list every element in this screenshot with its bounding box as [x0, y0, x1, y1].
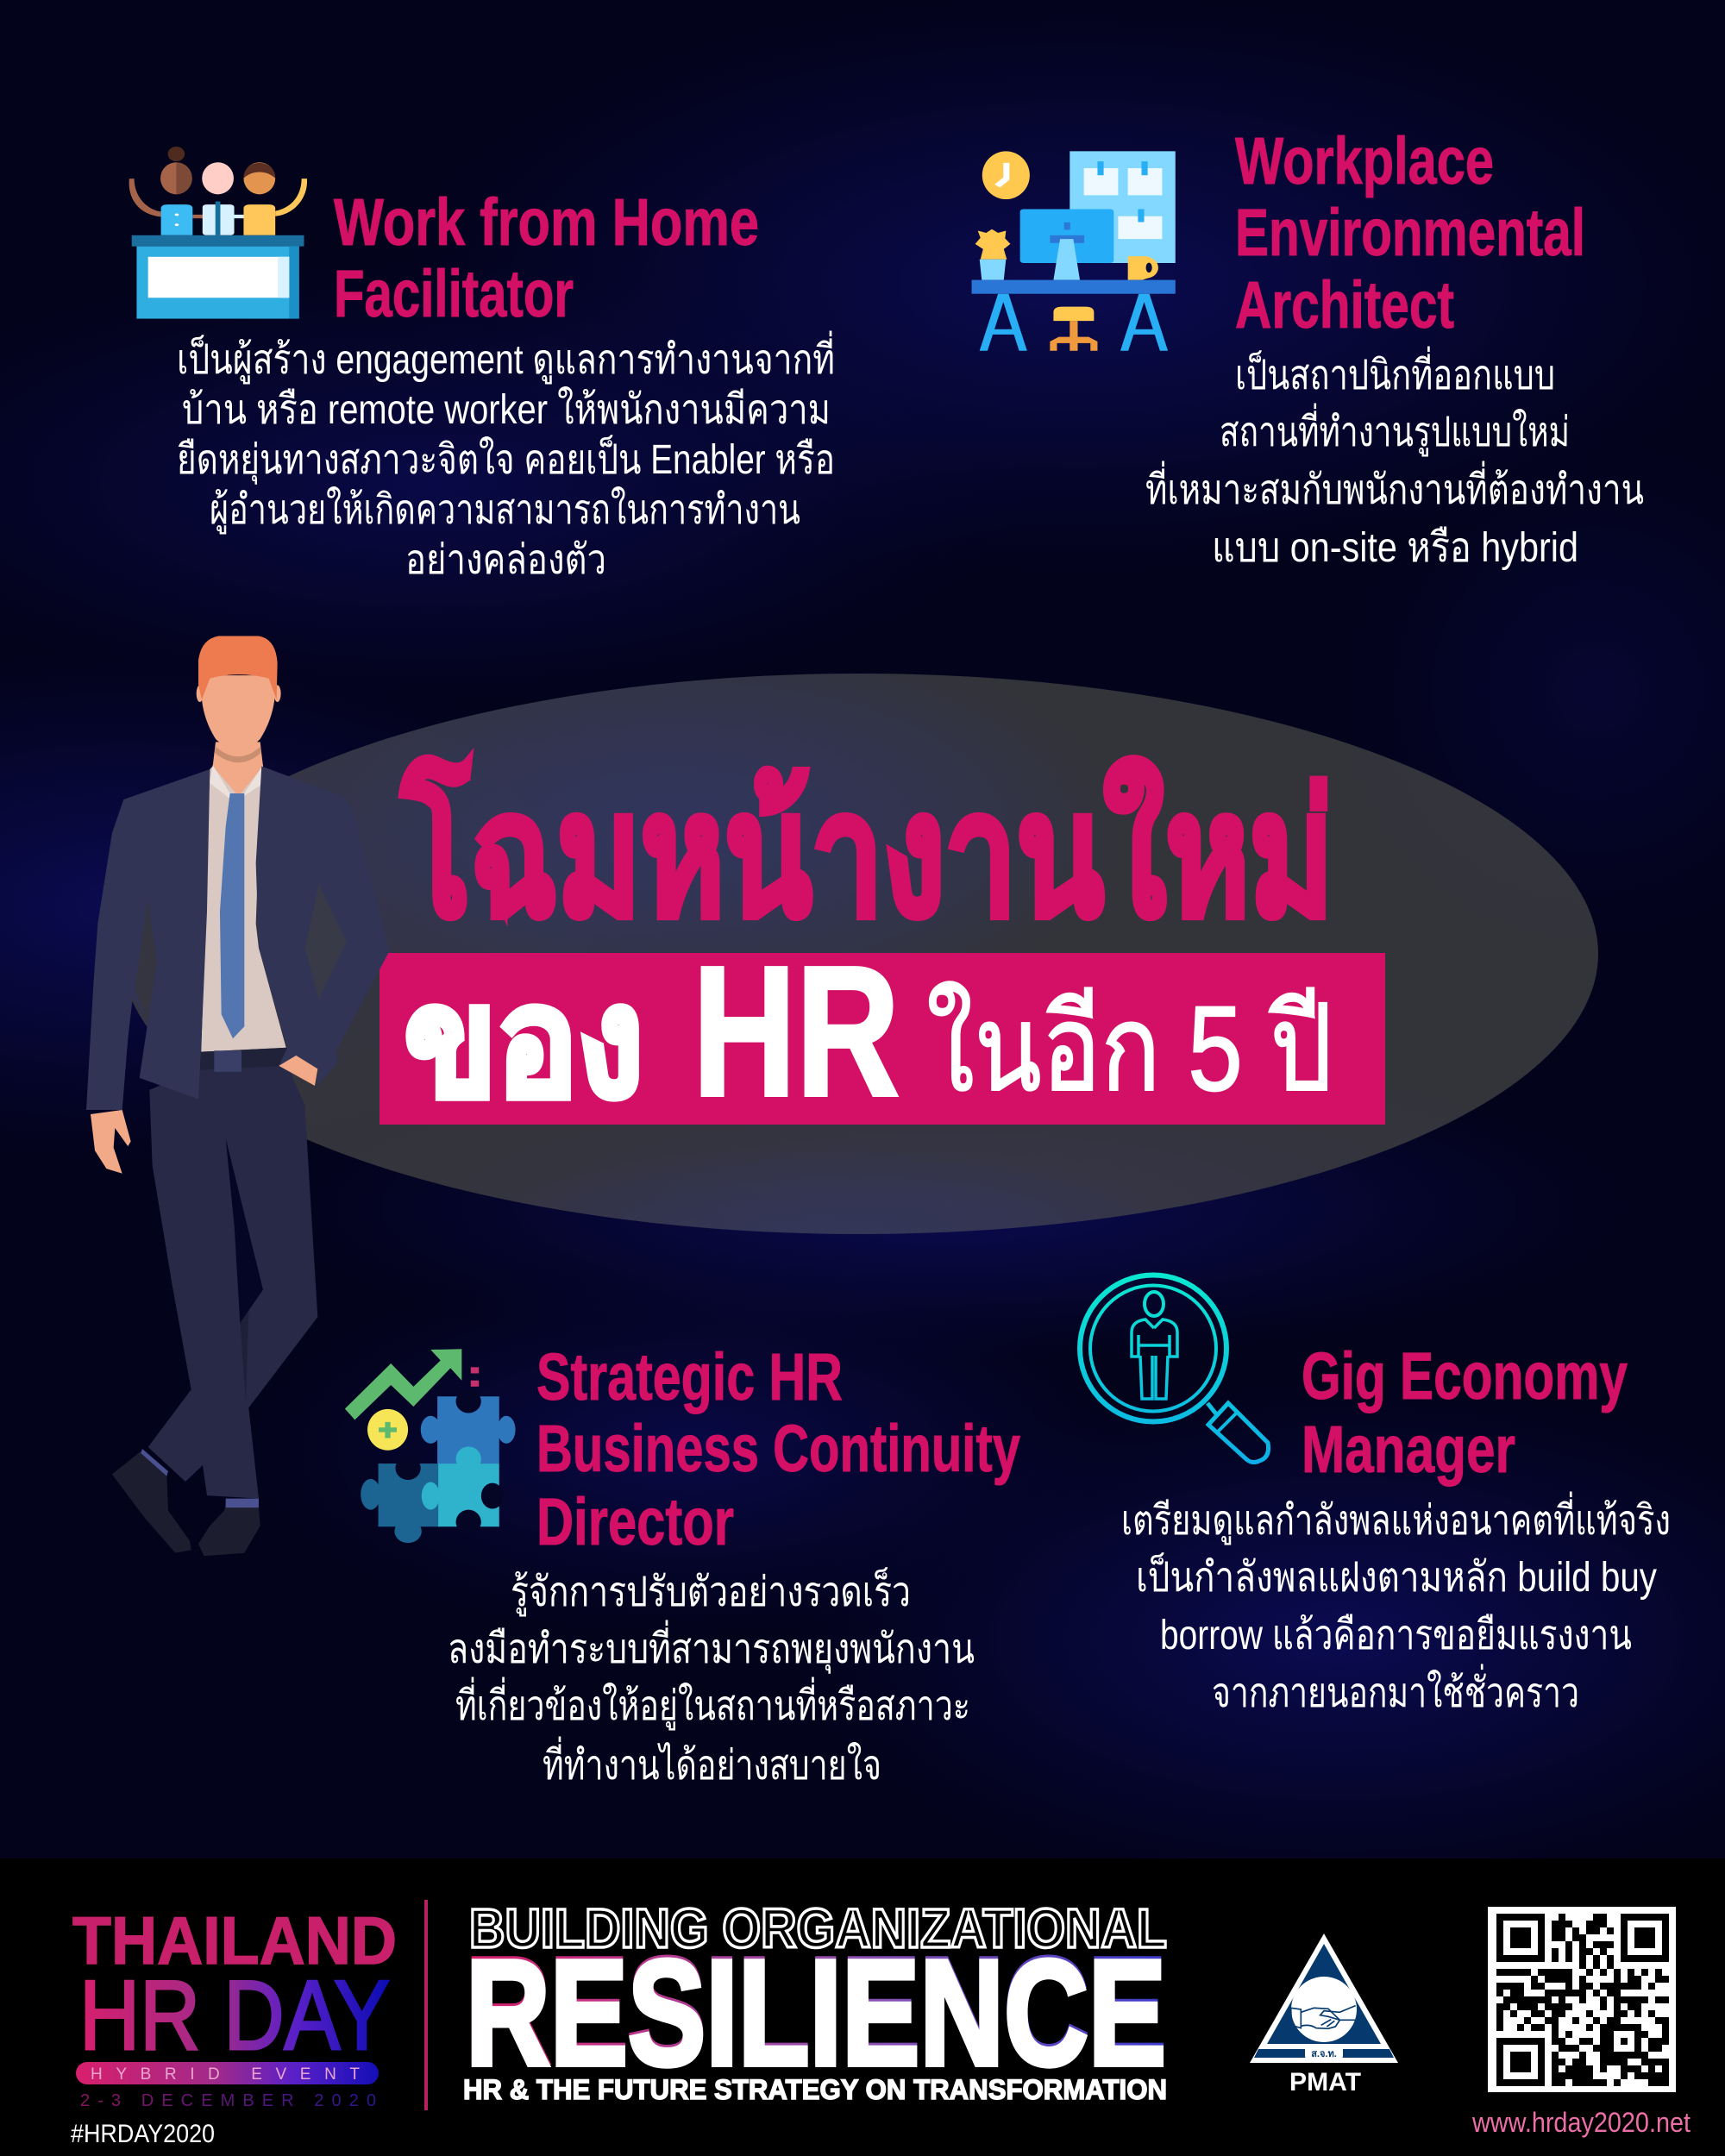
heading	[334, 185, 759, 331]
panel: strategic HR business continuity director	[345, 1340, 1020, 1789]
website url: www.hrday2020.net	[1471, 2107, 1690, 2138]
heading: Director	[536, 1485, 734, 1559]
icon: people at desk	[129, 147, 307, 319]
panel: gig economy manager	[1080, 1275, 1671, 1716]
logo: Building Organizational Resilience: HR & THE FUTURE STRATEGY ON TRANSFORMATION	[463, 2074, 1167, 2105]
text block: ผู้อำนวยให้เกิดความสามารถในการทำงาน	[210, 486, 800, 535]
heading: Manager	[1302, 1413, 1515, 1487]
text block: ยืดหยุ่นทางสภาวะจิตใจ คอยเป็น Enabler หรือ	[177, 435, 835, 485]
heading	[1235, 124, 1585, 342]
panel: work from home facilitator	[129, 147, 835, 583]
text block: อย่างคล่องตัว	[405, 537, 606, 583]
text block: สถานที่ทำงานรูปแบบใหม่	[1220, 403, 1570, 457]
text block: บ้าน หรือ remote worker ให้พนักงานมีความ	[182, 385, 831, 433]
text block	[1121, 1491, 1671, 1716]
text block	[1145, 346, 1644, 571]
text block: borrow แล้วคือการขอยืมแรงงาน	[1160, 1613, 1632, 1658]
heading: Architect	[1235, 268, 1454, 342]
logo: Building Organizational Resilience: BUILDING ORGANIZATIONAL	[469, 1897, 1167, 1959]
heading: Environmental	[1235, 196, 1585, 270]
heading: Work from Home	[334, 185, 759, 260]
panel: workplace environmental architect	[972, 124, 1644, 571]
text block: จากภายนอกมาใช้ชั่วคราว	[1212, 1664, 1579, 1716]
subtitle text: HR: HR	[693, 927, 900, 1135]
footer band	[0, 1858, 1725, 2156]
icon: desk with monitor and board	[972, 151, 1176, 351]
banner: subtitle	[380, 927, 1385, 1135]
logo: Thailand HR Day: HYBRID EVENT	[91, 2065, 360, 2084]
heading	[1302, 1339, 1628, 1487]
logo: Thailand HR Day: THAILAND	[72, 1902, 397, 1978]
icon: magnifier with person	[1080, 1275, 1269, 1463]
logo: Thailand HR Day	[72, 1902, 397, 2110]
icon: handshake	[1291, 2006, 1356, 2028]
icon: puzzle and growth arrow	[345, 1349, 516, 1543]
logo: Thailand HR Day: HR DAY	[79, 1961, 390, 2071]
text block: รู้จักการปรับตัวอย่างรวดเร็ว	[511, 1567, 911, 1617]
text block: เป็นผู้สร้าง engagement ดูแลการทำงานจากที่	[177, 330, 835, 385]
text block: เป็นสถาปนิกที่ออกแบบ	[1235, 346, 1555, 398]
heading: Gig Economy	[1302, 1339, 1628, 1413]
center ellipse	[133, 674, 1598, 1234]
text block: แบบ on-site หรือ hybrid	[1212, 525, 1578, 571]
heading: Workplace	[1235, 124, 1494, 198]
divider	[424, 1900, 428, 2110]
title: main heading: โฉมหน้างานใหม่	[401, 756, 1333, 950]
heading	[536, 1340, 1020, 1559]
QR code	[1488, 1907, 1676, 2092]
heading: Business Continuity	[536, 1412, 1020, 1486]
subtitle text: in 5 years: ในอีก 5 ปี	[926, 981, 1333, 1116]
logo: Building Organizational Resilience	[463, 1897, 1167, 2105]
heading: Strategic HR	[536, 1340, 843, 1414]
logo: Building Organizational Resilience: RESILIENCE	[466, 1928, 1166, 2096]
text block: ลงมือทำระบบที่สามารถพยุงพนักงาน	[448, 1620, 975, 1674]
logo: Thailand HR Day: 2-3 DECEMBER 2020	[80, 2091, 376, 2110]
text block	[177, 330, 835, 583]
logo: PMAT: PMAT	[1289, 2068, 1361, 2096]
text block: ที่ทำงานได้อย่างสบายใจ	[543, 1736, 881, 1789]
logo: Building Organizational Resilience: RESILIENCE	[466, 1926, 1166, 2094]
heading: Facilitator	[334, 257, 574, 331]
logo: PMAT: ส.จ.ท.	[1311, 2049, 1337, 2059]
hashtag: #HRDAY2020	[71, 2120, 215, 2148]
illustration: businessman	[86, 636, 390, 1556]
text block: ที่เกี่ยวข้องให้อยู่ในสถานที่หรือสภาวะ	[455, 1677, 970, 1731]
logo: PMAT	[1250, 1934, 1398, 2096]
text block	[448, 1567, 975, 1789]
subtitle text: of: ของ	[405, 956, 643, 1128]
